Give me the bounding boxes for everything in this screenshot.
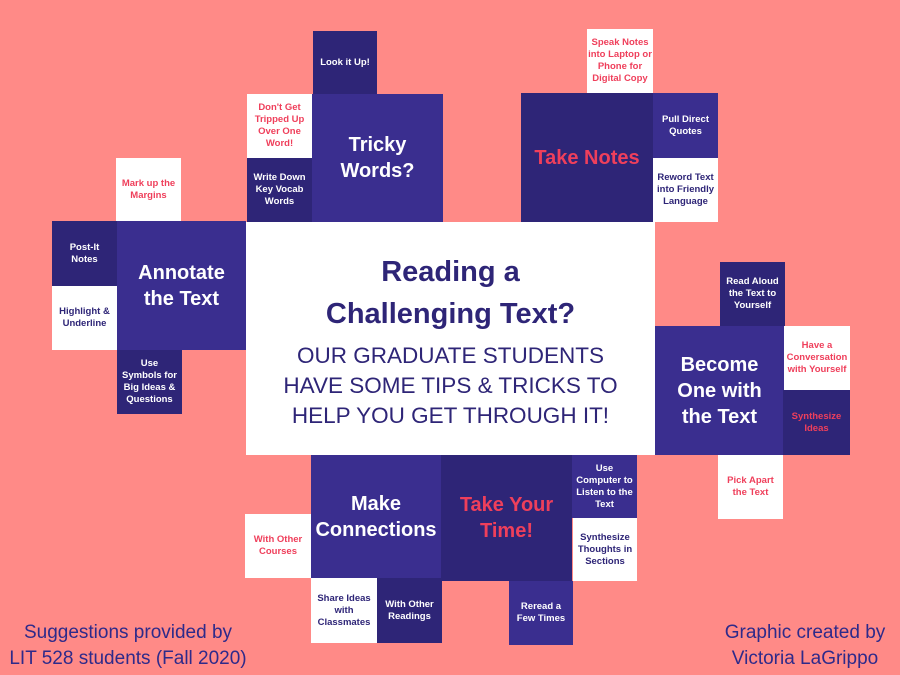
panel: Annotate the Text: the Text [144,288,219,310]
box: Reword Text [653,158,718,222]
footer: credits left [9,622,247,669]
panel: Take Your Time: Take Your [460,494,553,516]
box: Highlight & Underline [52,286,117,350]
box: Post-It Notes: Post-It [70,242,99,252]
footer: credits right: Graphic created by [725,622,885,643]
subtitle: OUR GRADUATE STUDENTS [297,342,604,368]
box: Pick Apart: Pick Apart the Text [727,475,774,498]
box: Speak Notes: Speak Notes into Laptop or Phone for Digital Copy [588,37,652,84]
box: Have a Conversation [784,326,850,390]
panel: Annotate the Text: Annotate [138,262,225,284]
box: Write Down Key Vocab: Write Down Key Vocab Words [253,172,306,207]
box: Reread [509,581,573,645]
heading [326,256,575,330]
box: Write Down Key Vocab [247,158,312,222]
panel: Become One with the Text [655,326,784,455]
box: Use Computer: Use Computer to Listen to the Text [576,462,633,510]
box: Have a Conversation: Have a Conversation with Yourself [787,340,847,375]
box: Highlight & Underline: Highlight & Underline [59,306,110,329]
box: Share Ideas: Share Ideas with Classmates [317,592,371,628]
box: Synthesize Thoughts: Synthesize Thoughts in Sections [578,532,632,566]
box: Pull Direct Quotes: Pull Direct Quotes [662,114,709,136]
box: Read Aloud: Read Aloud the Text to Yourself [726,276,779,311]
box: With Other Courses: With Other Courses [254,534,302,557]
panel: Take Your Time: Time! [480,520,533,542]
box: Reword Text: Reword Text into Friendly Language [657,172,714,207]
footer: credits left: Suggestions provided by [24,622,232,643]
footer: credits right: Victoria LaGrippo [732,648,878,669]
box: Synthesize Ideas [783,390,850,455]
box: Post-It Notes [52,221,117,286]
box: Don't Get Tripped Up [247,94,312,158]
panel: Take Notes [521,93,653,222]
center panel: title [246,222,655,455]
box: Mark up the Margins [116,158,181,221]
box: Pick Apart [718,455,783,519]
box: Pull Direct Quotes [653,93,718,158]
box: Look it Up [313,31,377,94]
box: Use Symbols [117,350,182,414]
box: Share Ideas [311,578,377,643]
heading: Challenging Text? [326,298,575,330]
panel: Annotate the Text [117,221,246,350]
panel: Tricky Words [312,94,443,222]
panel: Tricky Words: Tricky [349,134,406,156]
panel: Become One with the Text: Become [681,354,758,376]
box: Read Aloud [720,262,785,326]
box: Post-It Notes: Notes [71,254,98,264]
subtitle [283,342,618,428]
panel: Make Connections: Make [351,492,401,514]
box: With Other Readings: With Other Readings [385,598,434,622]
heading: Reading a [381,256,520,288]
box: Use Symbols: Use Symbols for Big Ideas & Questions [122,358,177,405]
subtitle: HELP YOU GET THROUGH IT! [292,402,609,428]
box: With Other Courses [245,514,311,578]
panel: Tricky Words: Words? [340,160,415,182]
box: Synthesize Ideas: Synthesize Ideas [792,410,841,434]
panel: Take Notes: Take Notes [534,146,640,168]
panel: Become One with the Text: the Text [682,406,757,428]
box: Don't Get Tripped Up: Don't Get Tripped Up Over One Word! [255,102,304,149]
box: Mark up the Margins: Mark up the Margins [122,178,175,200]
box: Use Computer [572,455,637,518]
panel: Make Connections [311,455,441,578]
box: With Other Readings [377,578,442,643]
panel: Make Connections: Connections [315,518,437,540]
panel: Take Your Time [441,455,572,581]
box: Reread: Reread a Few Times [517,601,565,624]
footer: credits left: LIT 528 students (Fall 2020) [9,648,247,669]
box: Look it Up: Look it Up! [320,56,370,68]
subtitle: HAVE SOME TIPS & TRICKS TO [283,372,618,398]
footer: credits right [725,622,886,669]
box: Synthesize Thoughts [573,518,637,581]
panel: Become One with the Text: One with [677,380,762,402]
